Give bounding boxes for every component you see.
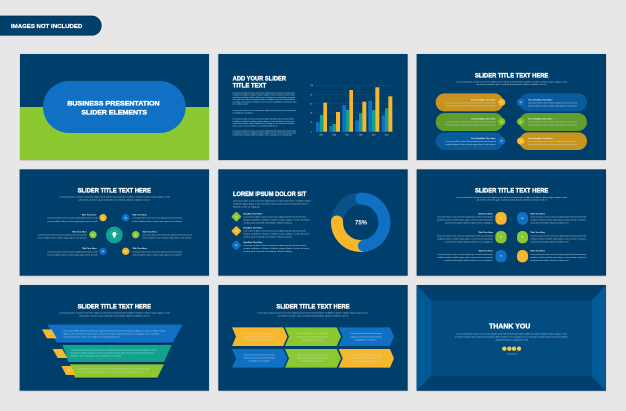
tab: green right: 05 [520,121,522,123]
tab: gold right: Your Headline Text Here [528,137,553,140]
subtitle: ad minim veniam quis nostrud exercitation ullamco laboris nisi ut [476,83,547,86]
funnel tier: blue [42,325,183,344]
body text: incididunt ut labore [233,111,254,114]
bar chart: 60 [310,103,312,105]
tab: gold left: tempor incididunt ut labore et dolore magna aliqua ut enim ad minim [446,104,496,107]
body text: nostrud exercitation ullamco laboris nisi ut aliquip ex ea commodo consequat [233,122,295,125]
tab: gold left [436,93,505,111]
left labels: Title Text Here [72,230,87,233]
item 3: Headline Text Here [243,241,263,244]
panel: chevrons slide [218,285,408,391]
subtitle [59,196,170,202]
tab: blue right: 04 [520,101,522,104]
item 2: tempor incididunt ut labore et dolore magna aliqua ut enim ad minim [243,233,310,236]
heading: SLIDER TITLE TEXT HERE [78,188,151,195]
left labels: tempor incididunt ut labore et dolore magna aliqua ut enim ad minim [47,220,98,223]
tab: green right: tempor incididunt ut labore et dolore magna aliqua ut enim ad minim [528,124,577,127]
tab: green right: Lorem ipsum dolor sit amet consectetur adipiscing elit sed do eiusmod [528,121,578,124]
item 1: veniam quis nostrud exercitation ullamco laboris [243,221,292,224]
heading [233,76,286,90]
body text: reprehenderit in voluptate velit [495,339,528,342]
tab: blue left [436,132,505,150]
panel: bar chart slide [218,54,408,160]
number pills: 03 [500,256,502,258]
subtitle: ad minim veniam quis nostrud exercitation ullamco laboris nisi ut [476,199,547,202]
left labels: Lorem ipsum dolor sit amet consectetur adipiscing elit sed do eiusmod [47,217,98,220]
node circles: 03 [102,251,104,253]
number pills: 04 [521,217,523,220]
bar chart: 0 [311,131,312,133]
website label: @username [507,354,517,356]
left text blocks: Lorem ipsum dolor sit amet consectetur adipiscing elit sed do eiusmod tempor [437,215,493,218]
right labels: Title Text Here [132,247,148,250]
chevron row 1: Lorem ipsum dolor sit amet consectetur [243,332,275,335]
chevron row 1: adipiscing elit sed do eiusmod tempor [297,335,329,338]
heading: TITLE TEXT [233,83,266,90]
body text [233,92,297,137]
tab: gold right [517,132,587,150]
heading: ADD YOUR SLIDER [233,76,286,83]
panel: rounded tabs slide [417,54,606,160]
body text: incididunt ut labore et dolore magna aliqua ut enim ad minim veniam quis [233,132,296,135]
number pills [495,212,528,262]
item 3: tempor incididunt ut labore et dolore magna aliqua ut enim ad minim [243,247,310,250]
right text blocks: incididunt ut labore et dolore magna aliqua ut enim ad minim veniam quis [530,237,586,240]
heading: SLIDER TITLE TEXT HERE [475,188,549,195]
intro text: et dolore magna aliqua ut enim ad minim veniam quis nostrud exercitation ullamco [233,202,309,205]
subtitle: Lorem ipsum dolor sit amet consectetur adipiscing elit sed do eiusmod tempor incididunt ut labore et dolore magna aliqua ut enim [258,311,369,314]
node circles: 04 [125,216,127,219]
heading: LOREM IPSUM DOLOR SIT [233,191,306,198]
item 2: Headline Text Here [243,227,263,230]
chevron row 2: Lorem ipsum dolor sit amet consectetur [350,354,382,357]
right text blocks: nostrud exercitation ullamco laboris nisi [530,221,569,224]
panel: thank you slide [417,285,606,391]
bar chart: 2020 [385,134,388,136]
tab: green left: Lorem ipsum dolor sit amet consectetur adipiscing elit sed do eiusmod [446,121,496,124]
tab: gold right: Lorem ipsum dolor sit amet consectetur adipiscing elit sed do eiusmod [528,140,578,143]
subtitle: Lorem ipsum dolor sit amet consectetur adipiscing elit sed do eiusmod tempor incididunt ut labore et dolore magna aliqua ut enim [59,196,170,199]
tab: gold right: 06 [520,141,522,143]
bar chart: 2016 [332,134,336,136]
item 3: veniam quis nostrud exercitation ullamco laboris [243,250,292,253]
item 1: Headline Text Here [243,212,263,215]
left labels: Title Text Here [82,214,97,217]
heading: SLIDER TITLE TEXT HERE [78,303,151,310]
item 2 [231,226,310,239]
intro text: Lorem ipsum dolor sit amet consectetur adipiscing elit sed do eiusmod tempor incididunt ut labore [233,199,312,202]
bar chart: 40 [310,113,312,115]
subtitle: ad minim veniam quis nostrud exercitation ullamco laboris nisi ut [79,314,150,317]
right text blocks: nostrud exercitation ullamco laboris nisi [530,240,569,243]
right text blocks: incididunt ut labore et dolore magna aliqua ut enim ad minim veniam quis [530,218,586,221]
subtitle: Lorem ipsum dolor sit amet consectetur adipiscing elit sed do eiusmod tempor incididunt ut labore et dolore magna aliqua ut enim [59,311,170,314]
right text blocks: Title Text Here [530,250,546,253]
donut chart: 75% [355,221,368,227]
icon: central light bulb [106,227,123,243]
number pills: 05 [521,237,523,239]
node circles: 02 [92,234,94,236]
panel: funnel slide [20,285,209,391]
item 2: Lorem ipsum dolor sit amet consectetur adipiscing elit sed do eiusmod [243,230,306,233]
intro text: laboris nisi ut aliquip [233,205,261,208]
subtitle: Lorem ipsum dolor sit amet consectetur adipiscing elit sed do eiusmod tempor incididunt ut labore et dolore magna aliqua ut enim [456,196,567,199]
panel: numbered pills slide [417,169,606,276]
body text: ad minim veniam quis nostrud exercitation ullamco laboris nisi ut aliquip ex ea commodo consequat duis aute irure dolor in [455,336,569,339]
right labels [132,214,192,256]
body text: incididunt ut labore et dolore magna aliqua ut enim ad minim veniam quis [233,94,295,97]
tab: gold left: Your Headline Text Here [471,98,496,101]
right labels: Title Text Here [142,230,158,233]
item 1: 01 [235,216,237,218]
right labels: Lorem ipsum dolor sit amet consectetur adipiscing elit sed do eiusmod [132,217,182,220]
body text: Lorem ipsum dolor sit amet consectetur adipiscing elit sed do eiusmod tempor [233,92,295,95]
funnel tier: green: 03 [68,370,70,372]
subtitle: Lorem ipsum dolor sit amet consectetur adipiscing elit sed do eiusmod tempor incididunt ut labore et dolore magna aliqua ut enim [456,80,567,83]
right labels: Lorem ipsum dolor sit amet consectetur adipiscing elit sed do eiusmod [132,251,182,254]
funnel tier: teal: laboris nisi ut aliquip ex ea commodo consequat [71,355,121,358]
chevron row 2: Lorem ipsum dolor sit amet consectetur [297,354,329,357]
chevron row 1: adipiscing elit sed do eiusmod tempor [243,335,275,338]
right labels: tempor incididunt ut labore et dolore magna aliqua ut enim ad minim [132,220,182,223]
body text: duis aute irure dolor in reprehenderit in voluptate velit esse cillum dolore [233,98,296,101]
chevron row 2: adipiscing elit sed do eiusmod tempor [243,357,275,360]
node circles [89,214,139,255]
chevron row 2: Lorem ipsum dolor sit amet consectetur [243,354,275,357]
body text: Lorem ipsum dolor sit amet consectetur adipiscing elit sed do eiusmod tempor [233,109,296,112]
right labels: tempor incididunt ut labore et dolore magna aliqua ut enim ad minim [132,253,182,256]
chevron row 1: Lorem ipsum dolor sit amet consectetur [350,332,382,335]
right text blocks: Lorem ipsum dolor sit amet consectetur adipiscing elit sed do eiusmod tempor [530,215,587,218]
tab: gold left: Lorem ipsum dolor sit amet consectetur adipiscing elit sed do eiusmod [446,101,496,104]
node circles: 05 [135,234,137,236]
body text [455,332,569,342]
panel: cover slide [20,54,209,160]
left text blocks: incididunt ut labore et dolore magna aliqua ut enim ad minim veniam quis [437,256,493,259]
tab: blue left: 03 [501,141,503,143]
body text: Lorem ipsum dolor sit amet consectetur adipiscing elit sed do eiusmod tempor [233,130,296,133]
chevron row 1: incididunt ut labore [248,339,271,342]
left text blocks: Lorem ipsum dolor sit amet consectetur adipiscing elit sed do eiusmod tempor [437,253,493,256]
left labels: tempor incididunt ut labore et dolore magna aliqua ut enim ad minim [47,253,98,256]
body text: Lorem ipsum dolor sit amet consectetur adipiscing elit sed do eiusmod tempor [233,118,295,121]
cover title [67,101,160,116]
body text: nostrud exercitation ullamco laboris nisi ut aliquip ex ea commodo consequat [233,96,295,99]
left text blocks: Title Text Here [478,212,494,215]
tag: images not included: IMAGES NOT INCLUDED [11,24,82,30]
funnel tier: teal: Lorem ipsum dolor sit amet consectetur adipiscing elit sed do eiusmod tempor incididunt ut labore [71,349,158,352]
funnel tier: teal [53,345,172,363]
left labels: tempor incididunt ut labore et dolore magna aliqua ut enim ad minim [37,237,87,240]
number pills: 01 [500,218,502,220]
item 3: Lorem ipsum dolor sit amet consectetur adipiscing elit sed do eiusmod [243,244,306,247]
funnel tier: green: ut labore et dolore magna aliqua ut enim ad minim veniam quis nostrud [77,370,145,373]
tab: blue left: tempor incididunt ut labore et dolore magna aliqua ut enim ad minim [446,143,496,146]
node circles: 01 [102,217,104,219]
tab: blue right: Lorem ipsum dolor sit amet consectetur adipiscing elit sed do eiusmod [528,101,578,104]
chevron row 2: incididunt ut labore [302,360,324,363]
body text: Lorem ipsum dolor sit amet consectetur adipiscing elit sed do eiusmod tempor incididunt ut labore et dolore magna aliqua ut enim [456,332,567,335]
left text blocks [437,212,494,262]
chevron row 2: incididunt ut labore [248,360,271,363]
subtitle: ad minim veniam quis nostrud exercitation ullamco laboris nisi ut [278,314,349,317]
chevron row 1: incididunt ut labore [355,339,378,342]
bar chart: 2018 [359,134,362,136]
item 3 [231,240,310,253]
left text blocks: nostrud exercitation ullamco laboris nisi ut aliquip ex [445,221,494,224]
chevron row 2: adipiscing elit sed do eiusmod tempor [350,357,382,360]
panel: radial idea slide [20,169,209,276]
tab: blue left: Your Headline Text Here [471,137,496,140]
tab: green left: tempor incididunt ut labore et dolore magna aliqua ut enim ad minim [446,124,496,127]
tab: blue right [517,93,587,111]
number pills: 06 [521,256,523,258]
subtitle [59,311,170,317]
bar chart: 100 [310,85,313,87]
tab: blue left: Lorem ipsum dolor sit amet consectetur adipiscing elit sed do eiusmod [446,140,496,143]
tab: green left: 02 [501,121,503,123]
node circles: 06 [125,251,127,253]
funnel tier: teal: 02 [59,353,61,355]
right labels: tempor incididunt ut labore et dolore magna aliqua ut enim ad minim [142,237,192,240]
bar chart [310,85,393,136]
left text blocks: incididunt ut labore et dolore magna aliqua ut enim ad minim veniam quis [437,237,493,240]
number pills: 02 [500,237,502,239]
right text blocks: Lorem ipsum dolor sit amet consectetur adipiscing elit sed do eiusmod tempor [530,234,587,237]
bevel frame [417,285,606,391]
chevron row 2 [232,349,394,368]
panel: donut chart slide [218,169,408,276]
tab: gold left: 01 [501,102,503,104]
right text blocks: incididunt ut labore et dolore magna aliqua ut enim ad minim veniam quis [530,256,586,259]
bar chart: 2017 [345,134,349,136]
left labels [37,214,98,256]
cover title: SLIDER ELEMENTS [81,109,148,116]
tab: green right: Your Headline Text Here [528,118,553,121]
body text: in culpa qui [233,103,248,105]
right text blocks: nostrud exercitation ullamco laboris nisi [530,259,569,262]
funnel tier: blue: consequat duis aute irure dolor in reprehenderit in [63,335,121,338]
tab: blue right: tempor incididunt ut labore et dolore magna aliqua ut enim ad minim [528,104,577,107]
heading: SLIDER TITLE TEXT HERE [276,303,350,310]
funnel tier: green [61,364,164,379]
bar chart: 20 [310,122,312,124]
left text blocks: nostrud exercitation ullamco laboris nisi ut aliquip ex [445,259,494,262]
subtitle [456,80,567,86]
left labels: Title Text Here [82,247,97,250]
right labels: Title Text Here [132,214,148,217]
right text blocks: Title Text Here [530,231,546,234]
funnel tier: green: Lorem ipsum dolor sit amet consectetur adipiscing elit sed do eiusmod tempor incididunt [77,367,150,370]
chevron row 1: adipiscing elit sed do eiusmod tempor [350,335,382,338]
bar chart: 2019 [372,134,375,136]
item 1: Lorem ipsum dolor sit amet consectetur adipiscing elit sed do eiusmod [243,215,306,218]
tag: images not included [0,16,101,35]
chevron row 1: incididunt ut labore [302,339,324,342]
intro text [233,199,312,208]
item 2: 02 [235,231,237,233]
right labels: Lorem ipsum dolor sit amet consectetur adipiscing elit sed do eiusmod [142,234,192,237]
right text blocks: Title Text Here [530,212,546,215]
item 1: tempor incididunt ut labore et dolore magna aliqua ut enim ad minim [243,218,310,221]
bar chart: 2015 [319,134,323,136]
subtitle: ad minim veniam quis nostrud exercitation ullamco laboris nisi ut [78,199,150,202]
heading: THANK YOU [489,321,530,330]
tab: gold right: tempor incididunt ut labore et dolore magna aliqua ut enim ad minim [528,143,577,146]
item 3: 03 [235,245,237,247]
left labels: Lorem ipsum dolor sit amet consectetur adipiscing elit sed do eiusmod [37,234,87,237]
left text blocks: nostrud exercitation ullamco laboris nisi ut aliquip ex [445,240,494,243]
left text blocks: Lorem ipsum dolor sit amet consectetur adipiscing elit sed do eiusmod tempor [437,234,493,237]
chevron row 2: incididunt ut labore [355,360,378,363]
right text blocks [530,212,587,262]
tab: green right [517,113,587,131]
funnel tier: blue: aliqua ut enim ad minim veniam quis nostrud exercitation ullamco laboris nisi ut aliquip ex ea commodo [63,332,160,335]
right text blocks: Lorem ipsum dolor sit amet consectetur adipiscing elit sed do eiusmod tempor [530,253,587,256]
cover title: BUSINESS PRESENTATION [67,101,160,108]
chevron row 1 [232,327,394,346]
tab: green left [436,113,505,131]
funnel tier: teal: et dolore magna aliqua ut enim ad minim veniam quis nostrud exercitation ullamco [71,352,155,355]
item 1 [231,211,310,224]
left text blocks: incididunt ut labore et dolore magna aliqua ut enim ad minim veniam quis [437,218,493,221]
tab: blue right: Your Headline Text Here [528,98,553,101]
item 2: veniam quis nostrud exercitation ullamco laboris [243,236,292,239]
subtitle [258,311,369,317]
chevron row 2: adipiscing elit sed do eiusmod tempor [297,357,329,360]
subtitle [456,196,567,202]
body text: nostrud exercitation ullamco laboris nisi ut aliquip ex ea commodo [233,134,293,137]
social icons [502,346,521,351]
tab: green left: Your Headline Text Here [471,118,496,121]
left text blocks: Title Text Here [478,231,494,234]
bar chart: 80 [310,94,312,96]
body text: eu fugiat nulla pariatur excepteur sint occaecat cupidatat non proident sunt [233,100,297,103]
donut chart [337,199,384,246]
left labels: Lorem ipsum dolor sit amet consectetur adipiscing elit sed do eiusmod [47,251,98,254]
heading: SLIDER TITLE TEXT HERE [475,72,549,79]
left text blocks: Title Text Here [478,250,494,253]
body text: incididunt ut labore et dolore magna aliqua ut enim ad minim veniam quis [233,120,294,123]
body text: duis aute irure dolor in reprehenderit in [233,124,279,127]
chevron row 1: Lorem ipsum dolor sit amet consectetur [297,332,329,335]
cover pill [43,81,186,133]
funnel tier: blue: 01 [48,334,50,336]
funnel tier: blue: Lorem ipsum dolor sit amet consectetur adipiscing elit sed do eiusmod tempor incididunt ut labore et dolore magna [63,329,166,332]
